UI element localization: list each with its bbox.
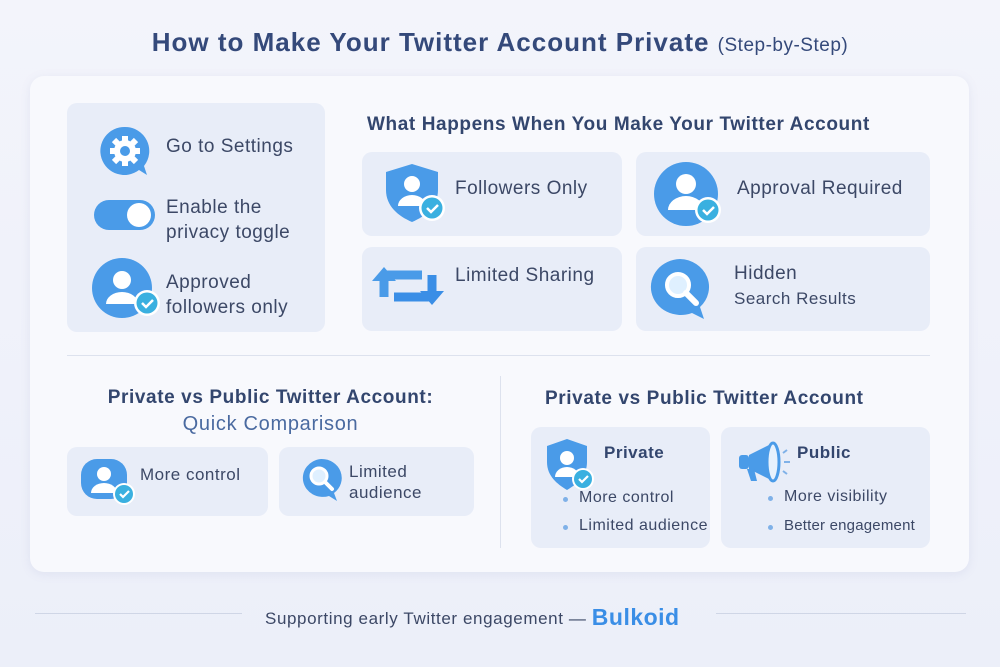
card: followers only: Followers Only: [455, 178, 588, 199]
card: private: More control: [579, 489, 674, 506]
step 2 text: [166, 197, 290, 243]
icon: megaphone: [739, 442, 790, 482]
title: How to Make Your Twitter Account Private (Step-by-Step): [152, 27, 848, 57]
card: limited sharing: Limited Sharing: [455, 265, 595, 286]
panel: steps: [67, 103, 325, 332]
icon: user check: [654, 162, 721, 226]
step 1 text: Go to Settings: [166, 136, 293, 157]
step 3 text: followers only: [166, 297, 288, 318]
step 2 text: Enable the: [166, 197, 262, 218]
card: approval required: Approval Required: [737, 178, 903, 199]
icon: search small: [302, 459, 342, 501]
card: public: [721, 427, 930, 548]
icon: settings: [100, 127, 150, 175]
card: limited audience: Limited: [349, 462, 407, 481]
heading: quick comparison: Quick Comparison: [183, 413, 358, 435]
icon: shield user: [386, 164, 445, 222]
main panel: [30, 76, 969, 572]
heading: quick comparison: [108, 387, 433, 435]
card: public: More visibility: [784, 488, 888, 505]
icon: user check small: [81, 459, 135, 505]
icon: search bubble: [650, 259, 710, 319]
step 3 text: [166, 272, 288, 318]
card: limited audience: [279, 447, 474, 516]
card: approval required: [636, 152, 930, 236]
icon: approved user: [92, 258, 160, 318]
divider: [67, 355, 930, 356]
heading: what happens: What Happens When You Make Your Twitter Account: [367, 114, 870, 135]
card: limited audience: audience: [349, 483, 422, 502]
footer: Supporting early Twitter engagement — Bulkoid: [265, 604, 680, 630]
card: public: Better engagement: [784, 517, 915, 534]
card: public: Public: [797, 443, 851, 462]
card: private: [531, 427, 710, 548]
heading: quick comparison: Private vs Public Twitter Account:: [108, 387, 433, 408]
card: hidden search: Search Results: [734, 289, 856, 308]
card: more control: More control: [140, 465, 240, 484]
heading: private vs public: Private vs Public Twitter Account: [545, 388, 864, 409]
card: private: Private: [604, 443, 664, 462]
card: private: Limited audience: [579, 517, 708, 534]
card: hidden search: [636, 247, 930, 331]
icon: retweet: [372, 267, 444, 305]
card: hidden search: Hidden: [734, 263, 797, 284]
step 2 text: privacy toggle: [166, 222, 290, 243]
step 3 text: Approved: [166, 272, 251, 293]
card: followers only: [362, 152, 622, 236]
card: more control: [67, 447, 268, 516]
icon: toggle: [94, 200, 155, 230]
icon: shield: [547, 439, 594, 490]
card: limited sharing: [362, 247, 622, 331]
